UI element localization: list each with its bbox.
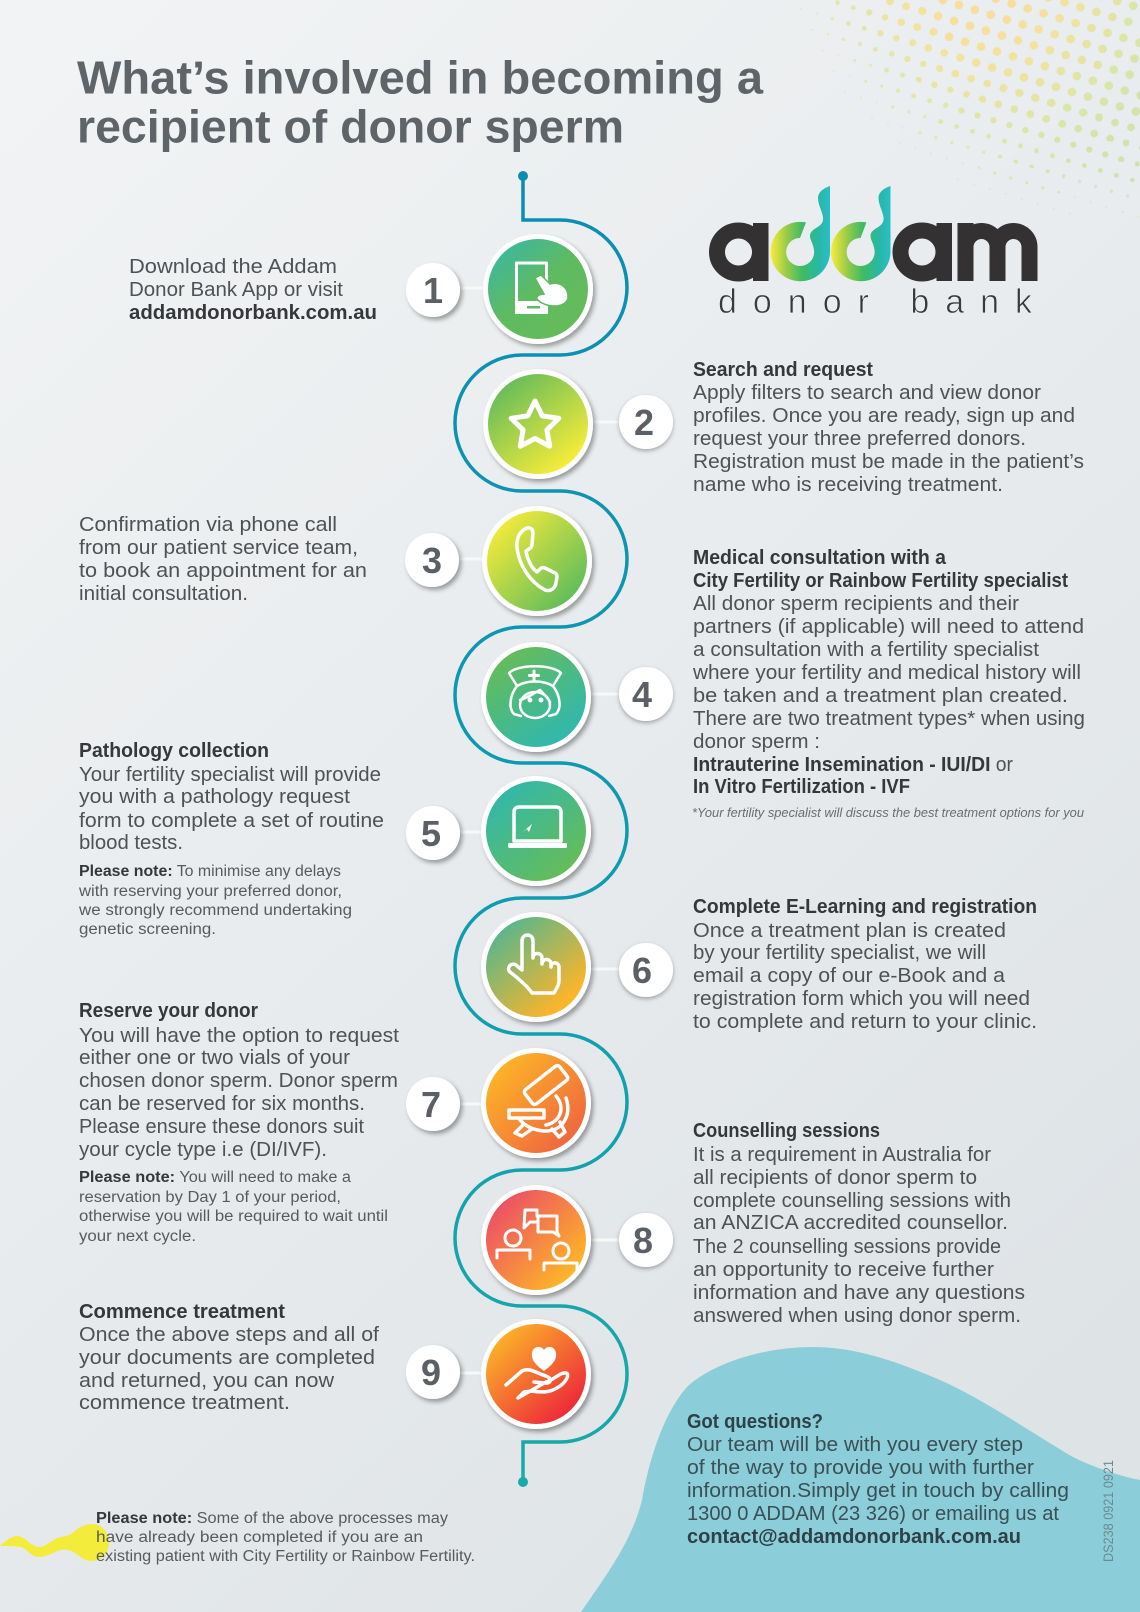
text: step 1 download — [129, 256, 377, 324]
step 4: 4 — [632, 674, 652, 715]
pathology note: genetic screening. — [79, 921, 216, 938]
text: step 4 medical consultation — [692, 547, 1085, 820]
text: step 4 medical consultation: In Vitro Fertilization - IVF — [693, 776, 910, 798]
icon: phone tap — [515, 263, 568, 314]
pathology note: with reserving your preferred donor, — [78, 883, 342, 900]
text: step 7 reserve your donor: can be reserved for six months. — [79, 1093, 365, 1115]
step 7: 7 — [421, 1084, 441, 1125]
step 4 — [481, 642, 673, 752]
text: step 7 reserve your donor: your cycle type i.e (DI/IVF). — [79, 1139, 327, 1161]
icon: pointing hand — [509, 935, 559, 993]
step 1 — [406, 234, 593, 344]
text: step 7 reserve your donor — [79, 1000, 399, 1245]
text: step 8 counselling sessions — [693, 1120, 1025, 1327]
text: step 3 confirmation: from our patient service team, — [79, 537, 358, 559]
bottom note: existing patient with City Fertility or Rainbow Fertility. — [96, 1548, 475, 1565]
title — [77, 52, 763, 152]
text: step 3 confirmation: initial consultation. — [79, 583, 248, 605]
contact text: got questions: Our team will be with you every step — [687, 1434, 1023, 1456]
step 1: 1 — [423, 270, 443, 311]
icon: star — [511, 401, 559, 446]
text: step 3 confirmation: to book an appointment for an — [79, 560, 367, 582]
text: step 4 medical consultation: be taken and a treatment plan created. — [693, 685, 1068, 707]
step 6: 6 — [632, 950, 652, 991]
pathology note: we strongly recommend undertaking — [78, 902, 352, 919]
text: step 5 pathology collection: blood tests. — [79, 832, 183, 854]
text: step 8 counselling sessions: an ANZICA accredited counsellor. — [693, 1212, 1008, 1234]
bottom note: have already been completed if you are an — [96, 1529, 423, 1546]
icon: yellow sperm — [0, 1524, 109, 1561]
text: step 2 search and request: request your three preferred donors. — [693, 428, 1026, 450]
text: step 7 reserve your donor: Reserve your donor — [79, 1000, 258, 1022]
text: step 9 commence treatment: and returned, you can now — [79, 1370, 335, 1392]
step 3: 3 — [422, 540, 442, 581]
step 7 — [406, 1048, 591, 1158]
text: step 4 medical consultation: donor sperm : — [693, 731, 820, 753]
text: step 2 search and request: Registration must be made in the patient’s — [693, 451, 1084, 473]
text: step 8 counselling sessions: information and have any questions — [693, 1282, 1025, 1304]
text: step 1 download: Download the Addam — [129, 256, 337, 278]
step 3 — [405, 506, 592, 616]
icon: two people talking — [497, 1210, 577, 1272]
text: step 9 commence treatment: your documents are completed — [79, 1347, 375, 1369]
logo: addam donor bank: donor bank — [718, 283, 1033, 321]
logo: addam donor bank — [717, 186, 1033, 321]
pathology note: Please note: To minimise any delays — [79, 863, 341, 880]
reserve note: Please note: You will need to make a — [79, 1169, 351, 1186]
step 2 — [483, 369, 673, 479]
pathology note — [78, 863, 352, 938]
text: step 4 medical consultation: City Fertility or Rainbow Fertility specialist — [693, 570, 1068, 592]
text: step 6 e-learning — [693, 896, 1037, 1033]
step 6 — [481, 912, 673, 1022]
text: step 6 e-learning: by your fertility specialist, we will — [693, 942, 986, 964]
document code: DS238 0921 0921 — [1101, 1460, 1116, 1562]
step 9 — [406, 1319, 591, 1429]
icon: hand holding heart — [506, 1347, 568, 1398]
step 5: 5 — [421, 813, 441, 854]
text: step 4 medical consultation: partners (if applicable) will need to attend — [693, 616, 1084, 638]
contact text: got questions — [687, 1411, 1069, 1548]
text: step 4 medical consultation: where your fertility and medical history will — [692, 662, 1081, 684]
text: step 6 e-learning: registration form which you will need — [693, 988, 1030, 1010]
text: step 8 counselling sessions: It is a requirement in Australia for — [693, 1144, 991, 1166]
text: step 5 pathology collection: Your fertility specialist will provide — [79, 764, 381, 786]
reserve note: reservation by Day 1 of your period, — [79, 1189, 341, 1206]
bottom note — [96, 1510, 475, 1565]
icon: microscope — [509, 1064, 569, 1137]
contact text: got questions: 1300 0 ADDAM (23 326) or emailing us at — [687, 1503, 1059, 1525]
text: step 8 counselling sessions: an opportunity to receive further — [693, 1259, 994, 1281]
text: step 8 counselling sessions: all recipients of donor sperm to — [693, 1167, 977, 1189]
text: step 4 medical consultation: Intrauterine Insemination - IUI/DI or — [693, 754, 1013, 776]
footnote: *Your fertility specialist will discuss the best treatment options for you — [692, 806, 1084, 820]
text: step 5 pathology collection: you with a pathology request — [79, 786, 350, 808]
text: step 7 reserve your donor: either one or two vials of your — [79, 1047, 350, 1069]
text: step 2 search and request: Apply filters to search and view donor — [693, 382, 1041, 404]
text: step 6 e-learning: email a copy of our e-Book and a — [693, 965, 1006, 987]
text: step 5 pathology collection: form to complete a set of routine — [79, 810, 384, 832]
connector timeline path — [455, 171, 627, 1487]
text: step 8 counselling sessions: complete counselling sessions with — [693, 1190, 1011, 1212]
icon: laptop — [508, 807, 567, 848]
text: step 2 search and request — [693, 359, 1084, 496]
title: recipient of donor sperm — [77, 100, 624, 152]
reserve note — [79, 1169, 388, 1245]
step 5 — [406, 776, 591, 886]
text: step 9 commence treatment: Commence treatment — [79, 1301, 285, 1323]
contact text: got questions: of the way to provide you with further — [687, 1457, 1034, 1479]
text: step 2 search and request: name who is receiving treatment. — [693, 474, 1003, 496]
text: step 7 reserve your donor: chosen donor sperm. Donor sperm — [79, 1070, 398, 1092]
step 8 — [481, 1185, 673, 1295]
text: step 4 medical consultation: There are two treatment types* when using — [693, 708, 1085, 730]
step 8: 8 — [633, 1220, 653, 1261]
text: step 2 search and request: Search and request — [693, 359, 873, 381]
text: step 2 search and request: profiles. Once you are ready, sign up and — [693, 405, 1075, 427]
text: step 9 commence treatment: commence treatment. — [79, 1392, 290, 1414]
step 9: 9 — [421, 1352, 441, 1393]
text: step 6 e-learning: to complete and return to your clinic. — [693, 1011, 1037, 1033]
text: step 8 counselling sessions: The 2 counselling sessions provide — [693, 1236, 1001, 1258]
contact blob background — [581, 1347, 1140, 1612]
text: step 4 medical consultation: All donor sperm recipients and their — [693, 593, 1019, 615]
text: step 3 confirmation: Confirmation via phone call — [79, 514, 337, 536]
text: step 6 e-learning: Complete E-Learning and registration — [693, 896, 1037, 918]
text: step 9 commence treatment: Once the above steps and all of — [79, 1324, 379, 1346]
contact text: got questions: Got questions? — [687, 1411, 823, 1433]
text: step 3 confirmation — [79, 514, 367, 605]
text: step 8 counselling sessions: answered when using donor sperm. — [693, 1305, 1021, 1327]
icon: phone handset — [517, 528, 557, 591]
text: step 7 reserve your donor: You will have the option to request — [79, 1025, 399, 1047]
icon: nurse — [509, 666, 561, 718]
text: step 5 pathology collection — [78, 740, 384, 938]
text: step 8 counselling sessions: Counselling sessions — [693, 1120, 880, 1142]
title: What’s involved in becoming a — [77, 52, 763, 104]
text: step 1 download: Donor Bank App or visit — [129, 279, 343, 301]
text: step 7 reserve your donor: Please ensure these donors suit — [79, 1116, 364, 1138]
text: step 4 medical consultation: a consultation with a fertility specialist — [693, 639, 1039, 661]
reserve note: your next cycle. — [79, 1228, 196, 1245]
reserve note: otherwise you will be required to wait until — [79, 1208, 388, 1225]
text: step 1 download: addamdonorbank.com.au — [129, 302, 377, 324]
step 2: 2 — [634, 402, 654, 443]
text: step 4 medical consultation: Medical consultation with a — [693, 547, 947, 569]
text: step 6 e-learning: Once a treatment plan is created — [693, 920, 1006, 942]
contact text: got questions: information.Simply get in touch by calling — [687, 1480, 1069, 1502]
text: step 5 pathology collection: Pathology collection — [79, 740, 269, 762]
text: step 9 commence treatment — [79, 1301, 379, 1414]
bottom note: Please note: Some of the above processes may — [96, 1510, 448, 1527]
contact text: got questions: contact@addamdonorbank.com.au — [687, 1526, 1021, 1548]
